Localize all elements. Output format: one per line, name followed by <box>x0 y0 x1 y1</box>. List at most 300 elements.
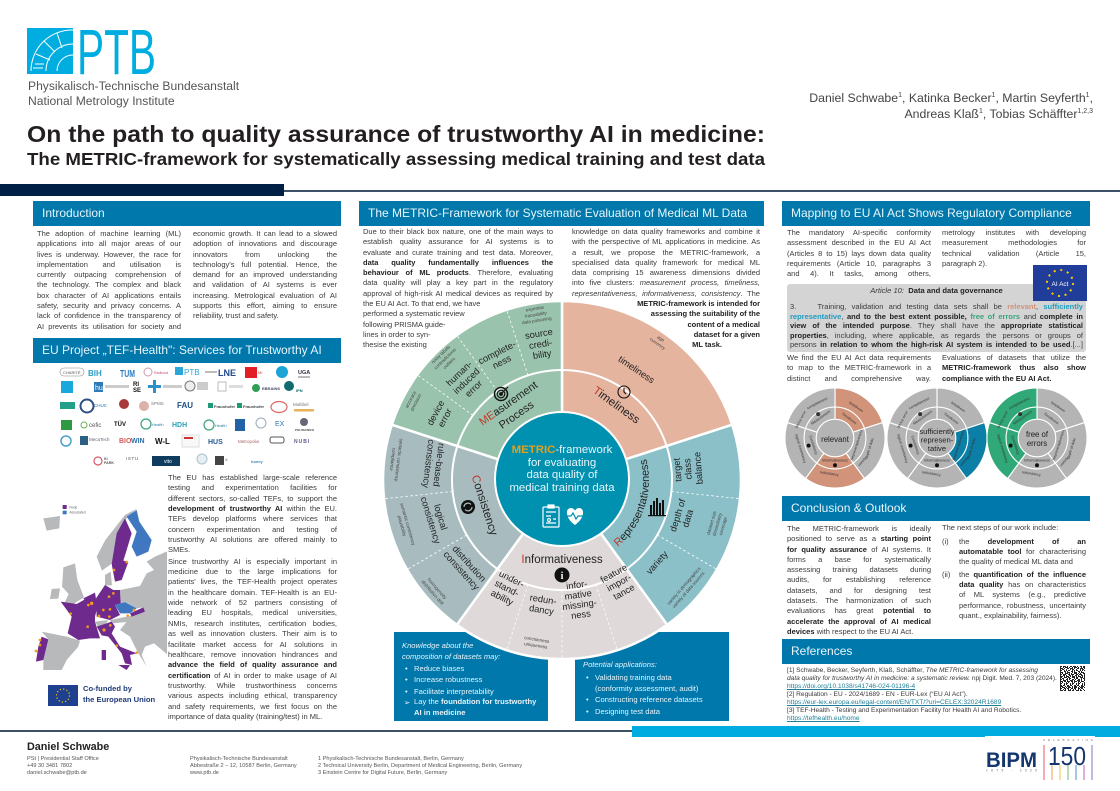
dimension labels: infor- <box>566 579 588 591</box>
dimension labels: under- <box>497 568 526 589</box>
authors: Andreas Klaß1, Tobias Schäffter1,2,3 <box>904 106 1093 120</box>
text: mapping finding left: to map to the METRIC-framework in a <box>787 363 931 372</box>
footer: address: Abbestraße 2 – 12, 10587 Berlin, Germany <box>190 762 297 768</box>
text: introduction left column: lives is underway. However, the race for <box>37 250 181 259</box>
heading: Introduction: Introduction <box>42 206 105 220</box>
text: conclusion left: assessing training datasets during <box>787 565 931 574</box>
small wheel: sufficiently representative: Timeliness <box>943 412 959 425</box>
footer: contact <box>27 741 109 776</box>
wheel centre text: data quality of <box>527 469 598 481</box>
text: mapping finding right: compliance with the EU AI Act. <box>942 374 1051 383</box>
text: METRIC intro right column: METRIC-framework is intended for <box>637 299 760 308</box>
partner logos: cefic <box>89 423 101 429</box>
quality metric labels: compliance <box>389 447 397 471</box>
text: introduction left column: AI prevents its utilisation for society and <box>37 322 181 331</box>
icon: AI Act flag <box>1033 265 1087 301</box>
text: METRIC intro left column: evaluate and curate training and test data. Moreover, <box>363 248 553 257</box>
quality metric labels: precision <box>409 393 423 412</box>
text: METRIC intro left column: Due to their black box nature, one of the main ways to <box>363 227 553 236</box>
footer: contact: Daniel Schwabe <box>27 741 109 753</box>
quality metric labels: homogeneity <box>427 577 448 601</box>
small wheel: sufficiently representative: tative <box>928 444 946 453</box>
text: METRIC intro right column: representativeness, informativeness, consistency. The <box>572 289 760 298</box>
partner logos: SE <box>133 388 141 394</box>
wheel centre text <box>509 444 615 494</box>
dimension labels: distribution <box>450 544 488 584</box>
heading: EU Project: EU Project „TEF-Health": Services for Trustworthy AI <box>42 343 322 357</box>
text: introduction left column: currently outpacing comprehension of <box>37 270 181 279</box>
METRIC framework wheel <box>384 302 740 660</box>
text: next steps: quant., explainability, fairness). <box>959 611 1061 620</box>
quality metric labels: distribution drift <box>420 579 445 606</box>
text: TEF-Health description: patients' lives, the TEF-Health project operates <box>168 577 337 586</box>
dimension labels: error <box>436 407 454 429</box>
small wheel: sufficiently representative: logical consistency <box>896 433 909 464</box>
text: references: [3] TEF-Health - Testing and Experimentation Facility for Health AI and Robotics. <box>787 707 1021 714</box>
title: The METRIC-framework for systematically assessing medical training and test data <box>27 149 765 169</box>
text: mapping right column: paragraph 2). <box>942 259 987 268</box>
text: introduction right column: increasing. Metrological evaluation of AI <box>193 291 337 300</box>
small wheel: free of errors: logical consistency <box>996 433 1009 464</box>
co-funding text: Co-funded by <box>83 684 132 693</box>
dimension labels: credi- <box>528 337 553 351</box>
footer: affiliations: 2 Technical University Berlin, Department of Medical Engineering, Berlin, Germany <box>318 762 522 768</box>
footer: contact: +49 30 3481 7802 <box>27 762 72 768</box>
small wheel: relevant: Timeliness <box>841 412 857 425</box>
text: mapping right column: technical validation (Article 15, <box>942 249 1086 258</box>
text: next steps: of ML systems (e.g., predictive <box>959 590 1086 599</box>
small wheel: sufficiently representative: sufficiently <box>919 427 955 436</box>
text: METRIC intro left column: data quality will play a key part in the regulatory <box>363 278 553 287</box>
footer: affiliations <box>318 756 522 776</box>
small wheel: free of errors: completeness <box>1008 396 1030 410</box>
map of Europe <box>34 505 167 670</box>
text: references: [1] Schwabe, Becker, Seyferth, Klaß, Schäffter, The METRIC-framework for assessing <box>787 667 1038 674</box>
partner logos: WIN <box>131 438 145 445</box>
text: introduction right column: demand for an improved understanding <box>193 270 337 279</box>
quality metric labels: variety in demographics <box>666 565 702 606</box>
text: METRIC intro left column: performed a systematic review <box>363 309 465 318</box>
partner logos: HUS <box>208 439 223 446</box>
text: TEF-Health description <box>168 473 337 721</box>
quality metric labels: uniqueness <box>524 641 548 650</box>
small wheel: relevant: depth of data <box>864 437 875 459</box>
dimension labels: stand- <box>493 578 521 599</box>
partner logos: KI <box>104 457 108 461</box>
dimension labels: logical <box>432 503 449 531</box>
text: conclusion left: positioned to serve as a starting point <box>787 534 931 543</box>
partner logos: LNE <box>218 368 236 378</box>
partner logos: Radboud <box>154 371 168 375</box>
box: Article 10 quote: 3. Training, validation and testing data sets shall be relevant, sufficiently <box>790 302 1083 311</box>
text: introduction left column: safety, security and privacy concerns. A <box>37 301 181 310</box>
dimension labels: missing- <box>562 597 597 612</box>
text: mapping left column <box>787 228 931 278</box>
dimension labels: rule-based <box>431 442 447 487</box>
footer: contact: PSt | Presidential Staff Office <box>27 756 99 762</box>
partner logos: RI <box>133 382 139 388</box>
partner logos: Health <box>152 422 164 427</box>
text: references: data quality for trustworthy AI in medicine: a systematic review. npj Digit. Med. 7, 203 (2024). <box>787 675 1057 682</box>
text: mapping finding right <box>942 353 1086 383</box>
text: TEF-Health description: The EU has established large-scale reference <box>168 473 337 482</box>
text: TEF-Health description: SMEs. <box>168 545 190 554</box>
quality metric labels: age <box>656 334 666 343</box>
text: next steps: the quantification of the influence <box>959 570 1086 579</box>
quality metric labels: data poisoning <box>522 316 552 325</box>
box: Article 10 quote: Article 10: Data and data governance <box>870 286 1003 295</box>
text: introduction right column: innovators from unlocking the <box>193 250 337 259</box>
text: mapping right column: measurement methodologies for <box>942 238 1086 247</box>
small wheel: relevant <box>785 388 885 488</box>
heading: Mapping: Mapping to EU AI Act Shows Regulatory Compliance <box>791 206 1072 220</box>
small wheel: relevant: device error <box>794 410 807 429</box>
text: introduction right column: supports this effort, aiming to ensure <box>193 301 337 310</box>
text: introduction left column: lack of confidence in the transparency of <box>37 311 181 320</box>
text: next steps: performance, robustness, uncertainty <box>959 601 1086 610</box>
callout: potential applications: Constructing reference datasets <box>595 695 703 704</box>
text: introduction left column: implementation and utilisation is <box>37 260 181 269</box>
dimension labels: human- <box>444 359 474 388</box>
small wheel: sufficiently representative: Measurement <box>912 410 933 426</box>
small wheel: relevant: variety <box>857 456 867 467</box>
text: METRIC intro right column <box>572 227 760 349</box>
text: mapping finding left <box>787 353 932 383</box>
dimension labels: class <box>682 458 694 480</box>
quality metric labels: coverage <box>718 516 728 536</box>
text: METRIC intro right column: assessing the suitability of the <box>651 309 760 318</box>
institute name: Physikalisch-Technische Bundesanstalt <box>28 79 239 93</box>
text: METRIC intro left column: establish quality assurance for AI systems is to <box>363 237 553 246</box>
heading: Mapping <box>782 201 1090 226</box>
text: TEF-Health description: facilitate market access for AI solutions in <box>168 640 337 648</box>
small wheel: free of errors: Measurement <box>1012 410 1033 426</box>
text: mapping finding left: We find the EU AI Act data requirements <box>787 353 931 362</box>
heading: Conclusion: Conclusion & Outlook <box>791 501 906 515</box>
co-funding text: the European Union <box>83 694 155 704</box>
dimension labels: error <box>463 378 484 399</box>
small wheel: free of errors: Timeliness <box>1043 412 1059 425</box>
text: conclusion left: for quality assurance of AI systems. It <box>787 545 931 554</box>
small wheel: free of errors: timeliness <box>1050 401 1066 413</box>
text: METRIC intro left column: approval of high-risk AI medical devices as required by <box>363 289 553 298</box>
quality metric labels: semantic consistency <box>399 503 416 547</box>
partner logos: IPN <box>296 388 303 393</box>
footer: affiliations: 3 Einstein Centre for Digital Future, Berlin, Germany <box>318 770 447 776</box>
dimension labels: source <box>524 327 553 341</box>
callout: potential applications: • <box>586 707 589 716</box>
dimension labels: target <box>672 457 684 482</box>
dimension labels: bility <box>532 348 552 361</box>
footer: address: Physikalisch-Technische Bundesanstalt <box>190 756 288 762</box>
text: METRIC intro left column: the EU AI Act. To that end, we have <box>363 299 480 308</box>
partner logos: PARK <box>104 461 114 465</box>
heading: References <box>782 639 1090 664</box>
text: METRIC intro right column: into five clusters: measurement process, timeliness, <box>572 278 760 287</box>
dimension labels: depth of <box>668 497 688 533</box>
small wheel: free of errors: Representativeness <box>1052 429 1066 461</box>
text: introduction right column: economic growth. It can lead to a slowed <box>193 229 337 238</box>
callout: knowledge about datasets: Increase robustness <box>414 675 482 684</box>
text: conclusion left: devices with respect to the EU AI Act. <box>787 627 913 636</box>
small wheel: relevant: relevant <box>821 435 850 444</box>
small wheel: free of errors: depth of data <box>1066 437 1077 459</box>
dimension labels: tance <box>612 582 636 602</box>
text: next steps: automatable tool for characterising <box>959 547 1086 556</box>
text: mapping left column: requirements (Article 10, paragraphs 3 <box>787 259 931 268</box>
text: conclusion left: evaluations has great potential to <box>787 606 931 615</box>
quality metric labels: contradictions <box>433 347 457 370</box>
text: TEF-Health description: NMIs, research institutes, certification bodies, <box>168 619 337 628</box>
cluster headers: MEasurement <box>477 379 540 428</box>
quality metric labels: traceability <box>525 310 548 319</box>
text: METRIC intro right column: with the perspective of ML applications in medicine. As <box>572 237 760 246</box>
dimension labels: ability <box>489 588 515 608</box>
callout: knowledge about datasets: • <box>405 675 408 684</box>
heading: Introduction <box>33 201 341 226</box>
text: introduction left column <box>37 229 181 331</box>
quality metric labels: syntactic consistency <box>394 438 404 482</box>
co-funding text <box>83 684 155 704</box>
text: TEF-Health description: development of trustworthy AI within the EU. <box>168 504 337 513</box>
EU co-funding emblem <box>48 685 78 706</box>
text: METRIC intro right column: dataset for a given <box>694 330 760 339</box>
BIPM 150 logo: BIPM <box>986 749 1037 772</box>
text: conclusion left: The METRIC-framework is ideally <box>787 524 931 533</box>
text: next steps: (i) <box>942 537 949 546</box>
small wheel: sufficiently representative: variety <box>959 456 969 467</box>
dimension labels: variety <box>644 549 670 576</box>
heading: METRIC-Framework <box>359 201 764 226</box>
dimension labels: induced <box>451 366 482 396</box>
cluster headers: Process <box>497 399 537 432</box>
dimension labels: ness <box>571 608 592 621</box>
text: METRIC intro left column: data quality fundamentally influences the <box>363 258 553 267</box>
partner logos: iit <box>225 458 228 462</box>
footer: contact: daniel.schwabe@ptb.de <box>27 770 87 776</box>
BIPM 150 logo <box>985 736 1095 780</box>
BIPM 150 logo: 150 <box>1048 741 1086 771</box>
text: TEF-Health description: certification of AI in order to make usage of AI <box>168 671 337 680</box>
institute name: National Metrology Institute <box>28 94 175 108</box>
partner logos: HDH <box>172 422 187 429</box>
callout: potential applications: (conformity assessment, audit) <box>595 684 698 692</box>
text: TEF-Health description: importance of data quality (training/test) in ML. <box>168 712 322 721</box>
partner logos: TÜV <box>114 421 126 428</box>
callout: potential applications <box>575 632 729 721</box>
quality metric labels: outliers <box>442 356 457 370</box>
callout: knowledge about datasets: Lay the foundation for trustworthy <box>414 697 536 706</box>
dimension labels: complete- <box>477 339 518 366</box>
text: mapping left column: (Articles 8 to 15) lays down data quality <box>787 249 931 258</box>
partner logos: EBRAINS <box>262 386 280 391</box>
small wheel: free of errors: device error <box>996 410 1009 429</box>
icon: AI Act flag: AI Act <box>1052 281 1069 288</box>
text: next steps: The next steps of our work include: <box>942 523 1058 532</box>
partner logos: Fraunhofer <box>214 404 236 409</box>
cluster headers: Timeliness <box>590 385 642 427</box>
partner logos: ISTU <box>126 456 139 461</box>
partner logos: CHARITÉ <box>63 370 81 375</box>
box: Article 10 quote: representative, and to the best extent possible, free of errors and complete in <box>790 312 1083 320</box>
text: next steps <box>942 523 1086 620</box>
text: mapping right column: metrology institutes with developing <box>942 228 1086 237</box>
authors: Daniel Schwabe1, Katinka Becker1, Martin Seyferth1, <box>809 91 1093 105</box>
small wheel: sufficiently representative: completeness <box>908 396 930 410</box>
partner logos: TUM <box>120 369 135 380</box>
callout: knowledge about datasets: composition of datasets may: <box>402 652 500 661</box>
cluster headers: Consistency <box>469 474 499 537</box>
text: TEF-Health description: healthcare, remove innovation hindrances and <box>168 650 337 659</box>
text: METRIC intro left column: following PRISMA guide- <box>363 320 446 329</box>
cluster headers <box>469 379 649 566</box>
text: mapping finding right: METRIC-framework thus also show <box>942 363 1086 372</box>
dimension labels: mative <box>564 588 592 602</box>
heading: EU Project <box>33 338 341 363</box>
wheel centre text: medical training data <box>509 482 615 494</box>
dimension labels: impor- <box>605 572 633 594</box>
box: Article 10 quote: properties, including, where applicable, as regards the persons or groups of <box>790 330 1083 340</box>
map of Europe: Node <box>69 505 77 509</box>
dimension labels: consistency <box>421 439 436 489</box>
dimension labels: consistency <box>441 549 482 592</box>
small wheel: free of errors: redundancy <box>1022 470 1041 477</box>
text: mapping left column: assessment described in the EU AI Act <box>787 238 931 247</box>
partner logos: POLITECNICO <box>295 428 315 432</box>
text: TEF-Health description: medicine due to the large implications for <box>168 567 337 576</box>
text: next steps: (ii) <box>942 570 950 579</box>
dimension labels <box>419 327 705 622</box>
footer: address: www.ptb.de <box>190 770 219 776</box>
small wheel: sufficiently representative: Representativeness <box>952 429 966 461</box>
partner logos: FAU <box>177 401 193 410</box>
text: TEF-Health description: TEFs develop platforms where services that <box>168 514 337 523</box>
quality metric labels: dissimilarity <box>712 512 723 537</box>
small wheel: free of errors: Consistency <box>1010 435 1020 455</box>
authors <box>809 91 1093 120</box>
heading: Conclusion <box>782 496 1090 521</box>
small wheel: sufficiently representative: depth of data <box>966 437 977 459</box>
text: METRIC intro left column: thesise the existing <box>363 340 427 349</box>
title <box>27 121 766 169</box>
text: METRIC intro right column: content of a medical <box>687 320 760 329</box>
text: TEF-Health description: and safety requirements, we first focus on the <box>168 702 337 711</box>
partner logos: BIO <box>119 438 132 445</box>
text: conclusion left: audits, for establishing reference <box>787 575 931 584</box>
text: introduction right column: reliability, trust and safety. <box>193 311 279 320</box>
callout: potential applications: • <box>586 695 589 704</box>
wheel centre text: METRIC-framework <box>512 444 613 456</box>
callout: knowledge about datasets: • <box>405 687 408 696</box>
text: introduction right column: technology's full potential. Hence, the <box>193 260 337 269</box>
quality metric labels: currency <box>649 337 667 351</box>
callout: knowledge about datasets: Knowledge about the <box>402 641 473 650</box>
small wheel: free of errors: Informativeness <box>1024 458 1050 462</box>
small wheel: sufficiently representative: Consistency <box>910 435 920 455</box>
text: conclusion left: datasets. The harmonization of such <box>787 596 931 605</box>
callout: potential applications: Designing test data <box>595 707 660 716</box>
small wheel: relevant: completeness <box>806 396 828 410</box>
text: TEF-Health description: leading EU hospitals, medical universities, <box>168 608 337 617</box>
callout: knowledge about datasets: • <box>405 664 408 673</box>
small wheel: relevant: redundancy <box>820 470 839 477</box>
text: METRIC intro right column: specialised data quality framework for medical ML <box>572 258 760 267</box>
text: next steps: data quality has on characteristics <box>959 580 1086 589</box>
partner logos: PTB <box>184 368 200 377</box>
dimension labels: timeliness <box>616 354 657 386</box>
partner logos: hu <box>95 385 103 392</box>
cluster headers: Informativeness <box>521 554 603 566</box>
text: references: https://tefhealth.eu/home <box>787 715 860 722</box>
text: TEF-Health description: advance the field of quality assurance and <box>168 660 337 669</box>
partner logos: UGA <box>298 370 310 376</box>
small wheel: sufficiently representative: device error <box>896 410 909 429</box>
partner logos: EX <box>275 421 285 428</box>
heading: References: References <box>791 644 852 658</box>
text: next steps: the development of an <box>959 537 1086 546</box>
small wheel: free of errors: variety <box>1059 456 1069 467</box>
dimension labels: dancy <box>528 603 555 617</box>
small wheel: sufficiently representative <box>887 388 987 488</box>
text: conclusion left: datasets, and for designing test <box>787 586 931 595</box>
text: references: [2] Regulation - EU - 2024/1689 - EN - EUR-Lex (“EU AI Act”). <box>787 691 968 698</box>
cluster headers: Representativeness <box>614 460 649 546</box>
callout: knowledge about datasets: Reduce biases <box>414 664 464 673</box>
PTB logo <box>27 28 156 75</box>
text: TEF-Health description: wide network of 52 partners consisting of <box>168 598 337 607</box>
partner logos: CHUC <box>94 403 108 408</box>
text: references: https://doi.org/10.1038/s41746-024-01196-4 <box>787 683 915 690</box>
partner logos: Fraunhofer <box>243 404 265 409</box>
quality metric labels: plausibility <box>397 515 407 537</box>
callout: knowledge about datasets <box>394 632 548 721</box>
small wheel: relevant: Informativeness <box>822 458 848 462</box>
partner logos <box>60 366 315 466</box>
title: On the path to quality assurance of trustworthy AI in medicine: <box>27 121 765 147</box>
map of Europe: Associated <box>69 511 86 515</box>
small wheel: relevant: Representativeness <box>850 429 864 461</box>
text: conclusion left <box>787 524 931 636</box>
text: mapping finding right: Evaluations of datasets that utilize the <box>942 353 1086 362</box>
partner logos: Metropolia <box>238 439 260 444</box>
callout: potential applications: Validating training data <box>595 673 672 682</box>
text: mapping left column: The mandatory AI-specific conformity <box>787 228 931 237</box>
quality metric labels: accuracy <box>404 390 417 409</box>
partner logos: vito <box>164 459 172 465</box>
wheel centre text: for evaluating <box>528 457 596 469</box>
partner logos: MI <box>258 370 262 375</box>
text: mapping finding left: distinct and comprehensive way. <box>787 374 931 383</box>
box: Article 10 quote <box>787 284 1086 352</box>
footer: affiliations: 1 Physikalisch-Technische Bundesanstalt, Berlin, Germany <box>318 756 464 762</box>
partner logos: NUBI <box>294 439 310 445</box>
text: introduction right column: and validation of AI systems is ever <box>193 280 337 289</box>
text: introduction left column: The adoption of machine learning (ML) <box>37 229 181 238</box>
text: introduction right column <box>193 229 337 320</box>
heading: METRIC-Framework: The METRIC-Framework for Systematic Evaluation of Medical ML Data <box>368 206 747 220</box>
dimension labels: ness <box>491 353 513 371</box>
quality metric labels: expertise <box>525 305 545 313</box>
small wheel: free of errors: errors <box>1027 439 1047 448</box>
cluster icons <box>461 386 666 582</box>
small wheel: relevant: timeliness <box>848 401 864 413</box>
footer: address <box>190 756 297 776</box>
dimension labels: balance <box>692 451 705 485</box>
text: conclusion left: forms a base for systematically <box>787 555 931 564</box>
text: METRIC intro right column: knowledge on data quality frameworks and combine it <box>572 227 760 236</box>
text: introduction left column: the technology. The complex and black <box>37 280 181 289</box>
text: METRIC intro right column: a result, we propose the METRIC-framework, a <box>572 248 760 257</box>
